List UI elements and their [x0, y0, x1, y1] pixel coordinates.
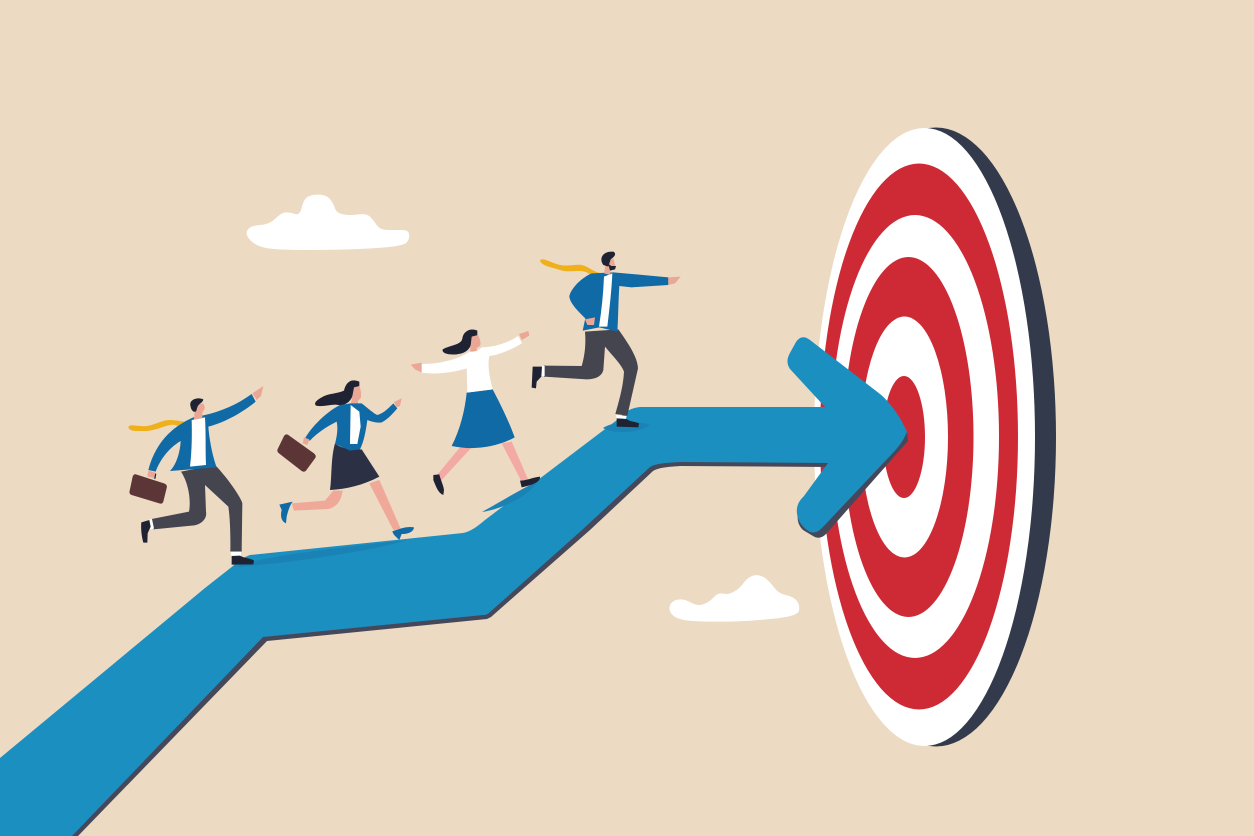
target: red ring 1 [820, 164, 1018, 710]
target: white ring 2 [831, 215, 999, 658]
target: red ring 2 [844, 257, 974, 617]
runner 1: man with briefcase [128, 386, 263, 565]
hair [443, 330, 477, 354]
head [604, 258, 616, 275]
briefcase [129, 473, 167, 504]
head [194, 403, 205, 419]
jacket [148, 394, 256, 472]
target: bullseye [883, 376, 925, 498]
runner 2: woman with briefcase [277, 380, 414, 540]
hair and beard [601, 252, 616, 271]
cloud: lower right [669, 575, 799, 622]
arrow: blue body and head [0, 337, 907, 836]
jacket [569, 272, 668, 332]
arrow [0, 337, 908, 836]
pants [152, 465, 242, 552]
socks [541, 366, 627, 419]
legs [435, 442, 528, 482]
face [351, 386, 361, 408]
jacket [305, 403, 397, 451]
socks [148, 519, 241, 556]
shoes [141, 520, 254, 565]
tie [540, 259, 609, 278]
shirt [350, 405, 361, 444]
hands [411, 331, 529, 373]
hair [315, 380, 359, 406]
tie [128, 419, 200, 431]
target: dark back side [816, 128, 1056, 746]
arrow: dark shadow edge [0, 432, 908, 836]
shirt [190, 417, 206, 467]
pants [544, 329, 638, 416]
skirt [452, 389, 515, 448]
hair [190, 398, 203, 412]
target: outer white ring [814, 128, 1035, 746]
shirt [599, 273, 612, 327]
hands [303, 398, 402, 445]
face [470, 335, 481, 355]
blouse [421, 336, 522, 393]
shoes [433, 474, 540, 495]
arrow: foot shadows [236, 422, 650, 567]
cloud: upper left [247, 195, 409, 250]
skirt [330, 443, 379, 490]
shoes [279, 502, 414, 540]
hands [147, 386, 263, 478]
target [814, 128, 1056, 746]
briefcase [277, 434, 316, 472]
legs [292, 480, 401, 530]
runner 3: woman in white blouse [411, 330, 540, 495]
runner 4: leading man pointing [532, 252, 681, 427]
hands [585, 277, 681, 325]
target: white ring 3 [861, 316, 948, 558]
shoes [532, 367, 639, 427]
